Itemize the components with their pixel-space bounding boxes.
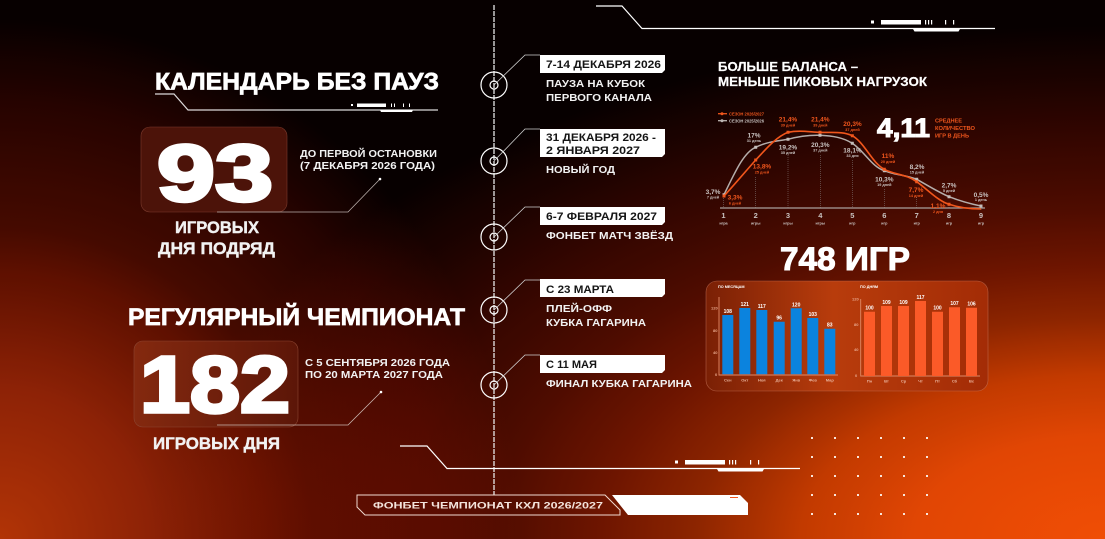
data labels: 2025/2026: 15 дней [910, 170, 925, 174]
bar chart: by weekday: Вс [969, 378, 975, 384]
dot grid decoration [811, 437, 928, 515]
stat: 4.11 games per day [877, 113, 975, 143]
x axis labels: 6 [882, 211, 886, 220]
data labels: 2025/2026: 35 дней [781, 151, 796, 155]
timeline item: cup final: С 11 МАЯ [546, 359, 597, 371]
line chart: games per day [706, 112, 989, 226]
bar chart: by month: 40 [713, 350, 718, 355]
bar chart: by weekday: 100 [933, 306, 942, 312]
data labels: 2025/2026: 0,5% [974, 192, 989, 199]
bar chart: by weekday: ПО ДНЯМ [860, 285, 878, 289]
data labels: 2026/2027: 37 дней [845, 128, 860, 132]
timeline item: new year: НОВЫЙ ГОД [546, 163, 616, 176]
legend: СЕЗОН 2025/2026 [729, 118, 764, 124]
data labels: 2025/2026: 5 дней [943, 189, 956, 193]
bar chart: by weekday: 117 [916, 295, 925, 301]
data labels: 2026/2027: 6 дней [729, 202, 742, 206]
bar chart: by weekday: 107 [950, 301, 959, 307]
bar chart: by weekday: 0 [855, 373, 858, 378]
heading: balance: МЕНЬШЕ ПИКОВЫХ НАГРУЗОК [718, 74, 927, 89]
data labels: 2026/2027: 3,3% [728, 194, 743, 202]
stat: 182 game days [134, 340, 450, 453]
caption: season dates: С 5 СЕНТЯБРЯ 2026 ГОДА [305, 357, 450, 369]
bar chart: by weekday: 80 [854, 322, 859, 327]
data labels: 2025/2026: 3,7% [706, 189, 721, 196]
timeline item: playoffs: ПЛЕЙ-ОФФ [546, 302, 612, 315]
x axis labels: игр [978, 222, 985, 226]
bar chart: by weekday: Ср [901, 378, 907, 384]
bar chart: by weekday: Пн [867, 378, 873, 384]
label: game days in a row: ИГРОВЫХ [175, 219, 259, 237]
title: regular season: РЕГУЛЯРНЫЙ ЧЕМПИОНАТ [128, 303, 465, 331]
data labels: 2025/2026: 19,2% [779, 144, 797, 152]
data labels: 2026/2027: 20,3% [843, 121, 862, 128]
data labels: 2026/2027: 25 дней [755, 170, 770, 174]
number 182: 182 [140, 340, 290, 429]
stat: 93 game days [141, 127, 437, 258]
x axis labels: игры [816, 222, 825, 226]
title: calendar without pauses [155, 68, 439, 112]
panel: 93 [141, 127, 287, 212]
bar chart: by weekday: Пт [935, 378, 940, 384]
timeline item: all-star game [481, 207, 674, 250]
timeline item: cup final: ФИНАЛ КУБКА ГАГАРИНА [546, 378, 692, 390]
label: game days: ИГРОВЫХ ДНЯ [153, 435, 280, 453]
stat: 4.11 games per day: 4,11 [877, 113, 930, 143]
x axis labels: игр [849, 222, 856, 226]
bar chart: by month: 117 [758, 304, 766, 310]
data labels: 2026/2027: 39 дней [813, 124, 828, 128]
heading: 748 games: 748 ИГР [780, 241, 910, 277]
top corner decoration [596, 6, 995, 32]
title: calendar without pauses: КАЛЕНДАРЬ БЕЗ ПАУЗ [155, 68, 439, 96]
x axis labels [719, 211, 985, 226]
bar chart: by month: Мар [826, 378, 834, 382]
data labels: 2026/2027: 2 дня [933, 210, 943, 214]
bar chart: by weekday: 40 [854, 347, 859, 352]
data labels: 2026/2027: 7,7% [909, 187, 924, 194]
bar chart: by month: 120 [711, 306, 718, 310]
label: game days in a row: ДНЯ ПОДРЯД [158, 240, 275, 258]
footer badge: ФОНБЕТ ЧЕМПИОНАТ КХЛ 2026/2027 [373, 500, 603, 510]
data labels: 2025/2026: 19 дней [877, 183, 892, 187]
caption: until first stop: ДО ПЕРВОЙ ОСТАНОВКИ [300, 147, 437, 160]
stat: 4.11 games per day: СРЕДНЕЕ [935, 118, 962, 124]
bar chart: by weekday [852, 285, 980, 384]
bar chart: by weekday: Чт [918, 378, 923, 384]
x axis labels: игр [946, 222, 953, 226]
bar chart: by month: 103 [809, 312, 817, 318]
bar chart: by month: Янв [792, 378, 801, 382]
data labels: 2025/2026: 18,1% [843, 148, 862, 154]
bar chart: by month: 121 [741, 302, 749, 308]
number 93: 93 [157, 128, 273, 218]
series: 2026/2027 [722, 131, 981, 209]
timeline item: first channel cup: ПЕРВОГО КАНАЛА [546, 92, 652, 104]
bar chart: by weekday: 100 [865, 306, 874, 312]
data labels: 2025/2026: 1 день [975, 198, 988, 202]
data labels: 2026/2027: 1,1% [931, 203, 946, 210]
x axis labels: игра [719, 222, 729, 226]
bar chart: by weekday: 109 [899, 300, 908, 306]
heading: balance [718, 59, 927, 89]
data labels: 2025/2026: 8,2% [910, 164, 925, 171]
caption: until first stop [300, 147, 437, 172]
timeline item: playoffs: С 23 МАРТА [546, 284, 614, 296]
x axis labels: 9 [979, 211, 983, 220]
data labels: 2025/2026: 10,3% [875, 176, 894, 184]
label: game days in a row [158, 219, 275, 258]
bar chart: by month: Окт [741, 378, 748, 382]
data labels: 2025/2026: 2,7% [942, 182, 957, 190]
caption: until first stop: (7 ДЕКАБРЯ 2026 ГОДА) [300, 160, 435, 172]
bar chart: by month: Дек [776, 378, 783, 382]
data labels: 2025/2026 [706, 132, 989, 202]
bar chart: by weekday: Сб [952, 378, 958, 384]
bar chart: by weekday: Вт [884, 378, 889, 384]
timeline item: new year [481, 129, 665, 176]
bar chart: by month: Фев [809, 378, 817, 382]
footer badge [357, 495, 748, 515]
data labels: 2025/2026: 17% [747, 132, 761, 140]
connector [217, 178, 381, 212]
bar chart: by month: ПО МЕСЯЦАМ [718, 285, 745, 289]
caption: season dates: ПО 20 МАРТА 2027 ГОДА [305, 369, 443, 381]
timeline item: new year: 2 ЯНВАРЯ 2027 [546, 145, 640, 157]
series: 2025/2026 [722, 134, 982, 208]
panel: 182 [134, 341, 298, 427]
bar chart: by weekday: 106 [967, 302, 976, 308]
data labels: 2026/2027: 20 дней [881, 160, 896, 164]
bottom line decoration [400, 446, 800, 472]
timeline item: all-star game: 6-7 ФЕВРАЛЯ 2027 [546, 211, 657, 223]
bar chart: by month: Ноя [758, 378, 766, 382]
timeline axis [493, 5, 495, 495]
data labels: 2026/2027: 13,8% [753, 164, 771, 170]
bar chart: by weekday: 120 [852, 296, 859, 302]
caption: season dates [305, 357, 450, 381]
x axis labels: игр [914, 222, 920, 226]
data labels: 2026/2027: 21,4% [811, 116, 830, 124]
data labels: 2025/2026: 7 дней [707, 196, 720, 200]
drop lines and axis [720, 155, 985, 210]
legend [718, 112, 764, 124]
data labels: 2026/2027: 39 дней [781, 124, 796, 128]
data labels: 2026/2027: 14 дней [909, 194, 924, 198]
data labels: 2025/2026: 31 день [747, 139, 762, 143]
x axis labels: 8 [947, 211, 951, 220]
data labels: 2025/2026: 20,3% [811, 142, 830, 149]
bar chart: by month: 0 [715, 372, 718, 377]
timeline item: first channel cup: 7-14 ДЕКАБРЯ 2026 [546, 59, 661, 71]
bar chart: by month: 108 [724, 309, 732, 315]
panel: bar charts [706, 281, 988, 391]
timeline item: new year: 31 ДЕКАБРЯ 2026 - [546, 132, 656, 144]
x axis labels: 5 [850, 211, 854, 220]
x axis labels: 1 [721, 211, 726, 220]
data labels: 2026/2027: 11% [882, 153, 895, 160]
stat: 4.11 games per day: КОЛИЧЕСТВО [935, 126, 975, 132]
bar chart: by month: Сен [724, 378, 732, 382]
x axis labels: игры [751, 222, 760, 226]
connector [217, 391, 382, 425]
x axis labels: 2 [754, 211, 758, 220]
timeline item: cup final [481, 355, 692, 398]
data labels: 2025/2026: 33 дня [846, 154, 859, 158]
bar chart: by month: 83 [827, 322, 833, 328]
timeline item: first channel cup: ПАУЗА НА КУБОК [546, 78, 646, 90]
x axis labels: 4 [818, 211, 823, 220]
bar chart: by month: 80 [713, 328, 718, 333]
stat: 4.11 games per day: ИГР В ДЕНЬ [935, 134, 969, 140]
bar chart: by month: 120 [792, 302, 801, 308]
bar chart: by weekday: 109 [882, 300, 891, 306]
legend: СЕЗОН 2026/2027 [729, 112, 764, 116]
timeline item: playoffs [481, 279, 665, 329]
data labels: 2026/2027 [728, 116, 946, 214]
timeline item: playoffs: КУБКА ГАГАРИНА [546, 317, 646, 329]
bar chart: by month [711, 285, 838, 382]
x axis labels: игр [881, 222, 888, 226]
bar chart: by month: 96 [776, 316, 782, 322]
x axis labels: 3 [786, 211, 790, 220]
heading: balance: БОЛЬШЕ БАЛАНСА – [718, 59, 858, 74]
x axis labels: 7 [915, 211, 919, 220]
data labels: 2025/2026: 37 дней [813, 148, 828, 152]
x axis labels: игры [783, 222, 793, 226]
timeline item: all-star game: ФОНБЕТ МАТЧ ЗВЁЗД [546, 229, 674, 242]
timeline item: first channel cup [481, 55, 665, 104]
data labels: 2026/2027: 21,4% [779, 116, 797, 124]
